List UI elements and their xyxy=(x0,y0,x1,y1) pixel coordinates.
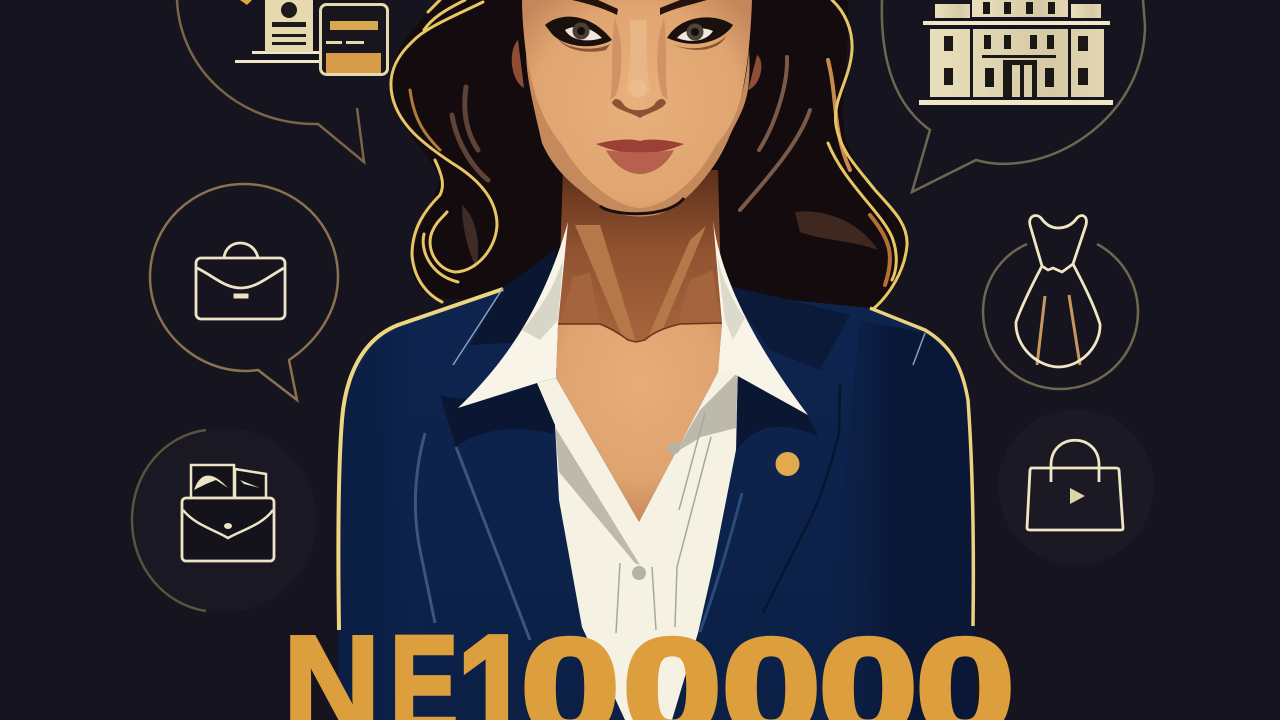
collar left shade xyxy=(522,260,563,340)
title xyxy=(283,604,1014,720)
blazer gold edge left xyxy=(338,289,503,630)
left sleeve shade xyxy=(338,320,430,720)
speech bubble: top right xyxy=(882,0,1145,192)
neck base line xyxy=(558,323,722,342)
lapel shadow right xyxy=(737,373,818,450)
left eye xyxy=(545,17,612,52)
speech bubble: briefcase xyxy=(150,184,338,400)
lapel shadow left xyxy=(440,383,556,447)
blazer xyxy=(338,260,975,720)
blazer seams xyxy=(415,288,925,640)
icon: building xyxy=(919,0,1113,105)
speech bubble: top left xyxy=(177,0,364,162)
lapel pin xyxy=(776,452,800,476)
shirt shadows xyxy=(555,372,738,565)
eyebrows xyxy=(572,0,707,15)
neck xyxy=(558,170,722,342)
illustration: woman in navy blazer xyxy=(338,0,975,720)
nose xyxy=(610,18,668,118)
hair brown mass right xyxy=(795,211,878,250)
icon: wallet with photos xyxy=(182,465,274,561)
ring: wallet xyxy=(132,428,317,612)
icon: dress xyxy=(1016,216,1100,367)
shirt folds xyxy=(616,413,711,633)
collar left xyxy=(458,222,568,408)
icon: shopping bag with play button xyxy=(1027,440,1123,530)
blazer gold edge right xyxy=(870,308,973,626)
neck tendons xyxy=(560,225,720,342)
hair gold outlines xyxy=(391,0,907,310)
blazer dark yoke right xyxy=(725,285,850,370)
face xyxy=(522,0,752,216)
face contour xyxy=(526,50,750,216)
icon: document and monitor xyxy=(235,0,388,74)
blazer dark yoke left xyxy=(470,250,560,345)
shirt xyxy=(537,360,738,720)
collar right xyxy=(713,220,808,415)
ears xyxy=(512,40,761,90)
mouth xyxy=(596,140,684,174)
jaw line xyxy=(600,198,684,214)
icon: briefcase xyxy=(196,243,285,319)
hair back xyxy=(390,0,907,315)
right eye xyxy=(667,17,733,50)
hair brown mass left xyxy=(462,205,478,268)
shirt buttons xyxy=(632,442,680,580)
hair strands xyxy=(410,57,890,285)
right sleeve shade xyxy=(820,320,975,720)
collar right shade xyxy=(717,255,745,340)
chest skin xyxy=(556,323,722,522)
ring: dress xyxy=(983,244,1138,389)
ring: bag xyxy=(998,409,1154,565)
